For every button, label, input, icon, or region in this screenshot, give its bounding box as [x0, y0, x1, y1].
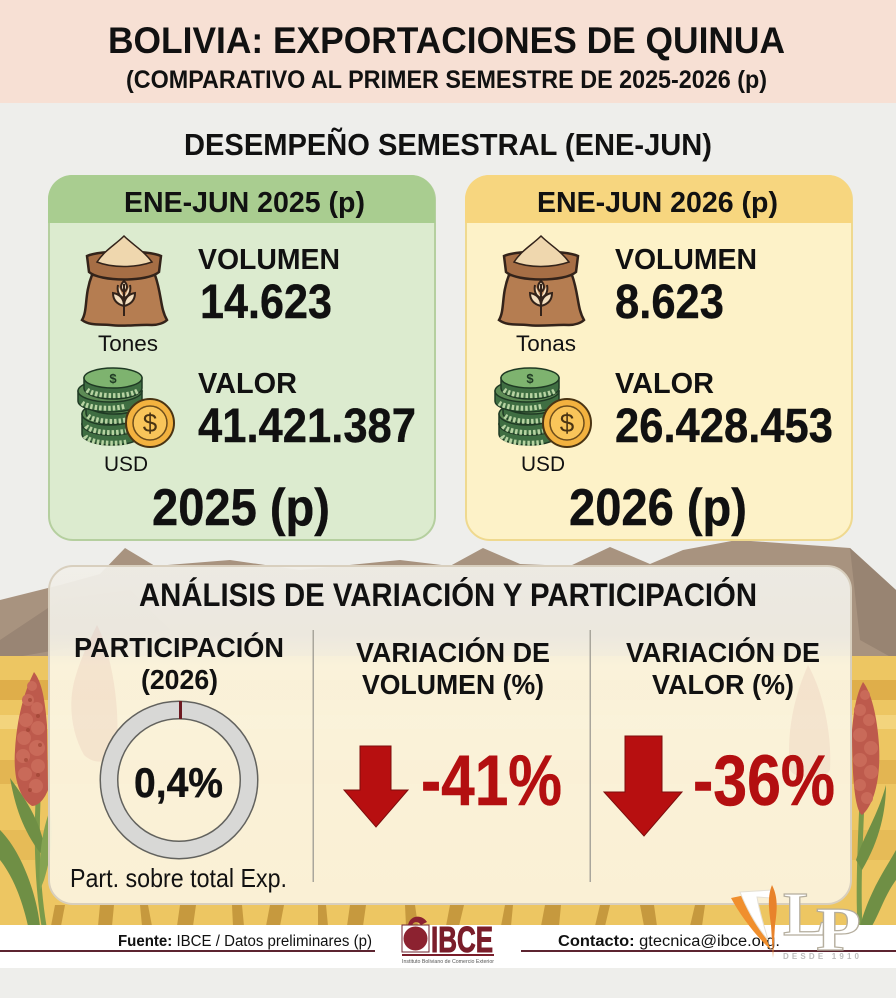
- heading: volume variation: [356, 637, 550, 700]
- card heading 2025: ENE-JUN 2025 (p): [124, 187, 365, 219]
- label: tones: Tones: [98, 331, 158, 356]
- card header 2025: [48, 175, 435, 223]
- value: volumen 2026: 8.623: [615, 276, 724, 329]
- arrow: value down: [604, 736, 682, 836]
- divider left: [312, 630, 314, 882]
- logo: LP: P: [816, 896, 861, 964]
- title: (COMPARATIVO AL PRIMER SEMESTRE DE 2025-2026 (p): [126, 66, 767, 94]
- icon: coins 2025: $: [109, 371, 117, 386]
- heading: analysis: ANÁLISIS DE VARIACIÓN Y PARTICIPACIÓN: [139, 577, 757, 613]
- icon: coins 2025: $: [143, 408, 158, 438]
- year label 2026: 2026 (p): [569, 479, 747, 537]
- footer band: [0, 925, 896, 968]
- logo: LP: [731, 881, 861, 964]
- footer source: Fuente: IBCE / Datos preliminares (p): [118, 933, 372, 950]
- header band: [0, 0, 896, 103]
- label: valor 2025: VALOR: [198, 368, 297, 400]
- title: [108, 20, 785, 94]
- section heading: desempeño: DESEMPEÑO SEMESTRAL (ENE-JUN): [184, 127, 712, 162]
- logo: LP: DESDE 1910: [783, 952, 860, 961]
- participation heading: PARTICIPACIÓN: [74, 632, 284, 663]
- value: valor 2025: 41.421.387: [198, 400, 416, 453]
- participation heading: [74, 632, 284, 695]
- donut chart: [109, 701, 249, 850]
- divider right: [590, 630, 591, 882]
- icon: sack 2026: [499, 236, 584, 326]
- icon: sack 2025: [82, 236, 167, 326]
- card: 2025: [48, 175, 435, 540]
- icon: coins 2025: [78, 368, 174, 447]
- card header 2026: [465, 175, 852, 223]
- donut value: 0,4%: [134, 759, 223, 806]
- year label 2025: 2025 (p): [152, 479, 330, 537]
- value: value variation: -36%: [693, 742, 835, 821]
- caption: share: Part. sobre total Exp.: [70, 863, 287, 893]
- logo: IBCE: IBCE: [431, 919, 493, 960]
- value: volume variation: -41%: [421, 742, 562, 821]
- arrow: volume down: [344, 746, 408, 827]
- panel: analysis: [49, 566, 851, 904]
- card heading 2026: ENE-JUN 2026 (p): [537, 187, 778, 219]
- participation heading: (2026): [141, 664, 218, 695]
- icon: coins 2026: [495, 368, 591, 447]
- label: usd: USD: [104, 453, 148, 476]
- heading: volume variation: VOLUMEN (%): [362, 669, 544, 700]
- ghost plants in panel: [71, 625, 830, 778]
- icon: coins 2026: $: [526, 371, 534, 386]
- logo: IBCE: [402, 917, 494, 965]
- label: volumen 2025: VOLUMEN: [198, 244, 340, 276]
- logo: LP: L: [783, 881, 827, 949]
- plant: right quinoa: [852, 682, 896, 926]
- landscape background: [0, 540, 896, 926]
- title: BOLIVIA: EXPORTACIONES DE QUINUA: [108, 20, 785, 61]
- value: valor 2026: 26.428.453: [615, 400, 833, 453]
- card: 2026: [465, 175, 852, 540]
- value: volumen 2025: 14.623: [200, 276, 332, 329]
- heading: value variation: VALOR (%): [652, 669, 794, 700]
- label: usd 2026: USD: [521, 453, 565, 476]
- heading: value variation: VARIACIÓN DE: [626, 637, 820, 668]
- label: tonas: Tonas: [516, 331, 576, 356]
- logo: IBCE: Instituto Boliviano de Comercio Exterior: [402, 959, 494, 965]
- label: volumen 2026: VOLUMEN: [615, 244, 757, 276]
- heading: value variation: [626, 637, 820, 700]
- icon: coins 2026: $: [560, 408, 575, 438]
- plant: left quinoa: [0, 672, 52, 926]
- label: valor 2026: VALOR: [615, 368, 714, 400]
- footer contact: Contacto: gtecnica@ibce.org.: [558, 933, 780, 950]
- heading: volume variation: VARIACIÓN DE: [356, 637, 550, 668]
